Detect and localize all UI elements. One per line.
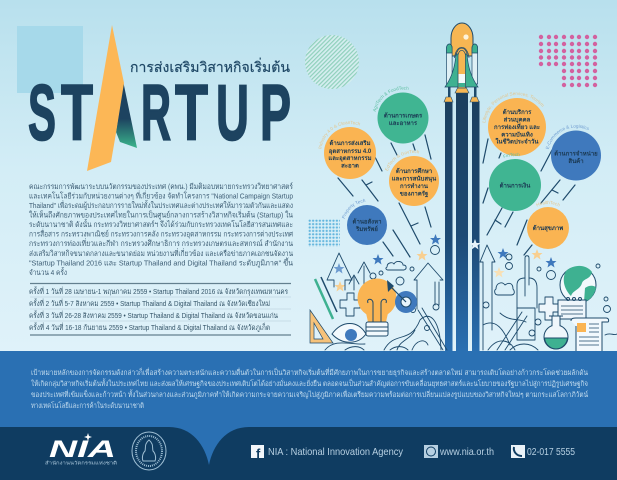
facebook contact: f bbox=[256, 446, 261, 461]
circle: industry: Industry 4.0 & CleanTech bbox=[318, 120, 360, 149]
circle: e-commerce: E-Commerce & Logistics bbox=[546, 124, 589, 150]
rocket bbox=[444, 23, 480, 352]
circle: industry: และอุตสาหกรรม bbox=[328, 155, 372, 162]
circle: property: ด้านอสังหา bbox=[353, 218, 381, 226]
circle: education: การทำงาน bbox=[400, 182, 429, 190]
circle: e-commerce: ด้านการจำหน่าย bbox=[554, 150, 598, 158]
circle: property bbox=[342, 198, 387, 245]
decorative blue dot grid bbox=[308, 219, 340, 247]
NIA logo: NIA bbox=[49, 436, 116, 463]
paper scroll bbox=[571, 318, 609, 352]
circle: education: ด้านการศึกษา bbox=[396, 167, 432, 175]
circle: lifestyle and tourism: Lifestyle, Personal Services, Tourism bbox=[482, 92, 544, 123]
circle: education: ของภาครัฐ bbox=[400, 190, 429, 198]
website contact: www.nia.or.th bbox=[439, 446, 494, 458]
document stack bbox=[558, 298, 586, 319]
arrows and clouds bbox=[325, 246, 447, 350]
facebook contact: NIA : National Innovation Agency bbox=[268, 446, 404, 458]
circle: industry: สะอาด bbox=[341, 162, 359, 170]
speed lines bbox=[338, 135, 575, 257]
title: STARTUP logo: T bbox=[175, 68, 208, 156]
circle: property: Property Tech bbox=[342, 198, 366, 219]
intro paragraph: "Startup Thailand 2016 และ Startup Thailand and Digital Thailand ระดับภูมิภาค" ขึ้น bbox=[29, 258, 293, 268]
circle: lifestyle and tourism: ในชีวิตประจำวัน bbox=[496, 138, 539, 146]
eye bbox=[332, 324, 366, 342]
target bbox=[387, 280, 417, 313]
circle: finance: FinTech bbox=[503, 152, 520, 158]
stars bbox=[334, 234, 556, 292]
title: STARTUP logo bbox=[17, 25, 291, 171]
intro paragraph bbox=[29, 182, 293, 277]
mission text bbox=[31, 367, 588, 410]
circle: property: ริมทรัพย์ bbox=[355, 225, 378, 233]
event schedule list bbox=[29, 284, 291, 335]
circle: education bbox=[385, 150, 439, 206]
phone contact bbox=[511, 445, 575, 458]
flask bbox=[544, 316, 568, 349]
intro paragraph: ให้เห็นถึงศักยภาพของประเทศไทยในการเป็นศูนย์กลางการสร้างวิสาหกิจเริ่มต้น (Startup) ใน bbox=[29, 210, 293, 220]
subtitle: การส่งเสริมวิสาหกิจเริ่มต้น bbox=[130, 58, 290, 75]
NIA logo: สำนักงานนวัตกรรมแห่งชาติ bbox=[45, 460, 117, 466]
circle: industry bbox=[318, 120, 376, 179]
circle: health bbox=[527, 200, 569, 249]
ruler triangle bbox=[310, 310, 333, 343]
lightbulb bbox=[358, 278, 396, 336]
circle: agriculture: ด้านการเกษตร bbox=[384, 112, 423, 120]
circle: health: ด้านสุขภาพ bbox=[533, 224, 563, 232]
intro paragraph: การสื่อสาร กระทรวงพาณิชย์ กระทรวงการคลัง กระทรวงอุตสาหกรรม กระทรวงการต่างประเทศ bbox=[29, 228, 293, 238]
panel: dark footer bbox=[0, 427, 617, 480]
title: STARTUP logo: S bbox=[28, 68, 56, 156]
line art: right side ideas bbox=[480, 245, 617, 352]
circle: e-commerce: สินค้า bbox=[568, 157, 584, 165]
circle: lifestyle and tourism bbox=[482, 92, 546, 156]
side tanks bbox=[446, 44, 478, 84]
intro paragraph: ระดับนานาชาติ ดังนั้น กระทรวงวิทยาศาสตร์ฯ จึงได้ร่วมกับกระทรวงเทคโนโลยีสารสนเทศและ bbox=[29, 219, 293, 229]
circle: agriculture: AgriTech & FoodTech bbox=[373, 86, 408, 112]
event schedule list: ครั้งที่ 4 วันที่ 16-18 กันยายน 2559 • Startup Thailand & Digital Thailand ณ จังหวัดภูเก็ต bbox=[29, 322, 270, 332]
window light bbox=[463, 34, 469, 40]
circle: health: HealthTech bbox=[536, 200, 560, 206]
rocket nose dome bbox=[451, 23, 473, 56]
circle: industry: ด้านการส่งเสริม bbox=[329, 139, 371, 147]
circle: lifestyle and tourism: ความบันเทิง bbox=[501, 130, 533, 138]
title: STARTUP logo: P bbox=[260, 68, 291, 156]
intro paragraph: กระทรวงการท่องเที่ยวและกีฬา กระทรวงศึกษาธิการ กระทรวงเกษตรและสหกรณ์ สำนักงาน bbox=[29, 238, 293, 248]
title: STARTUP logo: U bbox=[216, 68, 249, 156]
event schedule list: ครั้งที่ 1 วันที่ 28 เมษายน-1 พฤษภาคม 2559 • Startup Thailand 2016 ณ จังหวัดกรุงเทพมหานคร bbox=[29, 286, 288, 296]
rocket boosters bbox=[444, 83, 480, 352]
website contact bbox=[424, 445, 494, 458]
intro paragraph: จำนวน 4 ครั้ง bbox=[29, 267, 67, 277]
intro paragraph: และเทคโนโลยีร่วมกับหน่วยงานต่างๆ ที่เกี่ยวข้อง จัดทำโครงการ "National Campaign Startup bbox=[29, 190, 293, 200]
line art: left side ideas bbox=[310, 246, 447, 350]
shuttle bbox=[445, 47, 478, 88]
title: STARTUP logo: R bbox=[141, 68, 171, 156]
decorative pink dots bbox=[539, 35, 597, 87]
circle: agriculture bbox=[373, 86, 428, 144]
circle: lifestyle and tourism: ส่วนบุคคล bbox=[504, 116, 531, 124]
ministry seal bbox=[132, 432, 166, 470]
pencils bbox=[315, 277, 337, 319]
circle: e-commerce bbox=[546, 124, 601, 180]
event schedule list: ครั้งที่ 3 วันที่ 26-28 สิงหาคม 2559 • Startup Thailand & Digital Thailand ณ จังหวัดขอนแก่น bbox=[29, 310, 278, 320]
circle: lifestyle and tourism: การท่องเที่ยว และ bbox=[494, 122, 540, 131]
circle: finance: ด้านการเงิน bbox=[500, 182, 531, 190]
circle: agriculture: และอาหาร bbox=[389, 120, 418, 127]
facebook contact bbox=[251, 445, 404, 461]
circle: education: EdTech & GovTech bbox=[385, 150, 420, 171]
panel: blue mission band bbox=[0, 351, 617, 480]
circle: industry: อุตสาหกรรม 4.0 bbox=[329, 148, 372, 155]
intro paragraph: คณะกรรมการพัฒนาระบบนวัตกรรมของประเทศ (คพน.) มีมติมอบหมายกระทรวงวิทยาศาสตร์ bbox=[29, 182, 293, 191]
mission text: ทางเทคโนโลยีและการค้าในระดับนานาชาติ bbox=[31, 401, 144, 410]
event schedule list: ครั้งที่ 2 วันที่ 5-7 สิงหาคม 2559 • Startup Thailand & Digital Thailand ณ จังหวัดเชียงใหม่ bbox=[29, 298, 270, 308]
phone contact: 02-017 5555 bbox=[527, 447, 575, 458]
NIA logo bbox=[45, 433, 117, 466]
decorative striped circle bbox=[305, 35, 359, 89]
title: STARTUP logo: T bbox=[61, 68, 93, 156]
intro paragraph: Thailand" เพื่อระดมผู้ประกอบการรายใหม่ทั้งในประเทศและต่างประเทศให้มารวมตัวกันและแสดง bbox=[29, 200, 293, 210]
circle: education: และการสนับสนุน bbox=[392, 174, 437, 182]
intro paragraph: ส่งเสริมวิสาหกิจขนาดกลางและขนาดย่อม หน่วยงานที่เกี่ยวข้อง และเครือข่ายภาคเอกชนจัดงาน bbox=[29, 248, 293, 258]
circle: finance bbox=[489, 152, 541, 211]
circle: lifestyle and tourism: ด้านบริการ bbox=[503, 108, 532, 116]
icon: puzzle globe bbox=[560, 266, 596, 303]
